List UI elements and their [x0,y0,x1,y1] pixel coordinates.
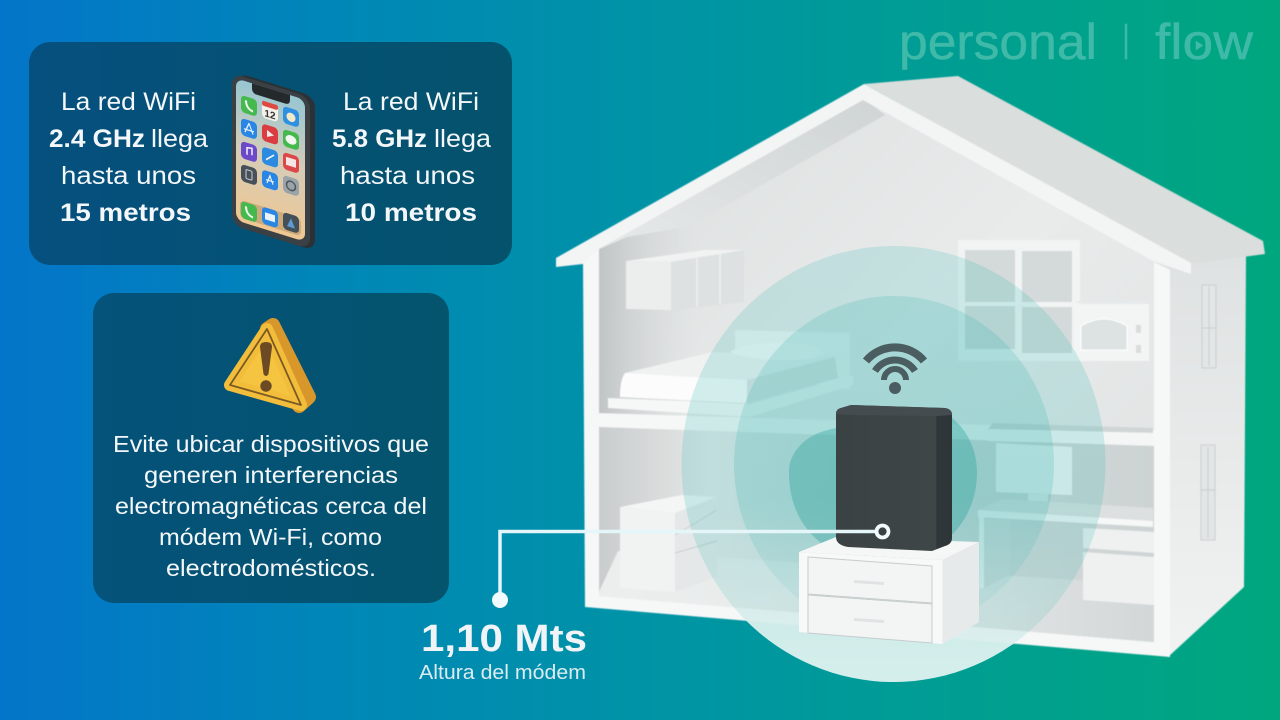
warning text: electromagnéticas cerca del [115,493,427,519]
side windows [1201,285,1216,540]
wifi icon [866,347,924,394]
roof soffit [597,98,885,250]
text: 2.4 GHz range: hasta unos [61,162,196,190]
roof fascia [556,84,1191,274]
desk [978,499,1153,588]
warning text: generen interferencias [144,462,398,488]
lower room back [597,427,1154,642]
left inner wall shading [597,226,700,420]
right drawers [1083,528,1154,605]
window [958,240,1080,361]
icon: smartphone [232,71,315,251]
microwave [1075,299,1153,361]
text: 2.4 GHz range: 2.4 GHz [49,125,145,153]
text: 5.8 GHz range: hasta unos [340,162,475,190]
text: 5.8 GHz range [332,88,491,227]
outer coverage circle [682,246,1106,682]
left drawers [620,495,717,592]
house side wall [1155,256,1246,657]
warning text [113,431,429,581]
middle coverage circle [734,296,1054,632]
icon: warning triangle [230,325,309,406]
modem [836,405,952,551]
height label: Altura del módem [419,662,586,684]
coverage circle base outside the house [682,246,1106,682]
text: 2.4 GHz range: llega [151,125,208,153]
callout line to modem [492,526,888,608]
icon: smartphone: 12 [264,108,276,123]
lower floor [597,551,1154,642]
warning text: módem Wi-Fi, como [159,524,382,550]
house illustration [556,76,1265,657]
floor slab [597,413,1154,446]
text: 2.4 GHz range [49,88,208,227]
text: 5.8 GHz range: La red WiFi [343,88,479,116]
inner coverage circle [789,416,977,562]
logo: personal flow: personal [899,14,1097,70]
text: 5.8 GHz range: 10 metros [345,199,477,227]
text: 2.4 GHz range: La red WiFi [61,88,196,116]
wifi coverage circles [682,246,1106,682]
text: 5.8 GHz range: llega [434,125,491,153]
nightstand [799,537,979,644]
upper wall cabinet [626,250,744,311]
text: 2.4 GHz range: 15 metros [60,199,191,227]
warning text: Evite ubicar dispositivos que [113,431,429,457]
height label [419,618,587,684]
front facade frame [583,248,1170,657]
desk shelf [988,423,1153,445]
logo: personal flow [899,14,1254,70]
warning text: electrodomésticos. [166,555,376,581]
roof top surface [864,76,1265,264]
bed [608,330,853,417]
logo: personal flow: flow [1155,14,1254,70]
panel: wifi range [29,42,512,265]
monitor [996,443,1072,510]
back wall [597,98,1156,640]
text: 5.8 GHz range: 5.8 GHz [332,125,427,153]
height label: 1,10 Mts [421,618,587,660]
panel: interference warning [93,293,449,603]
